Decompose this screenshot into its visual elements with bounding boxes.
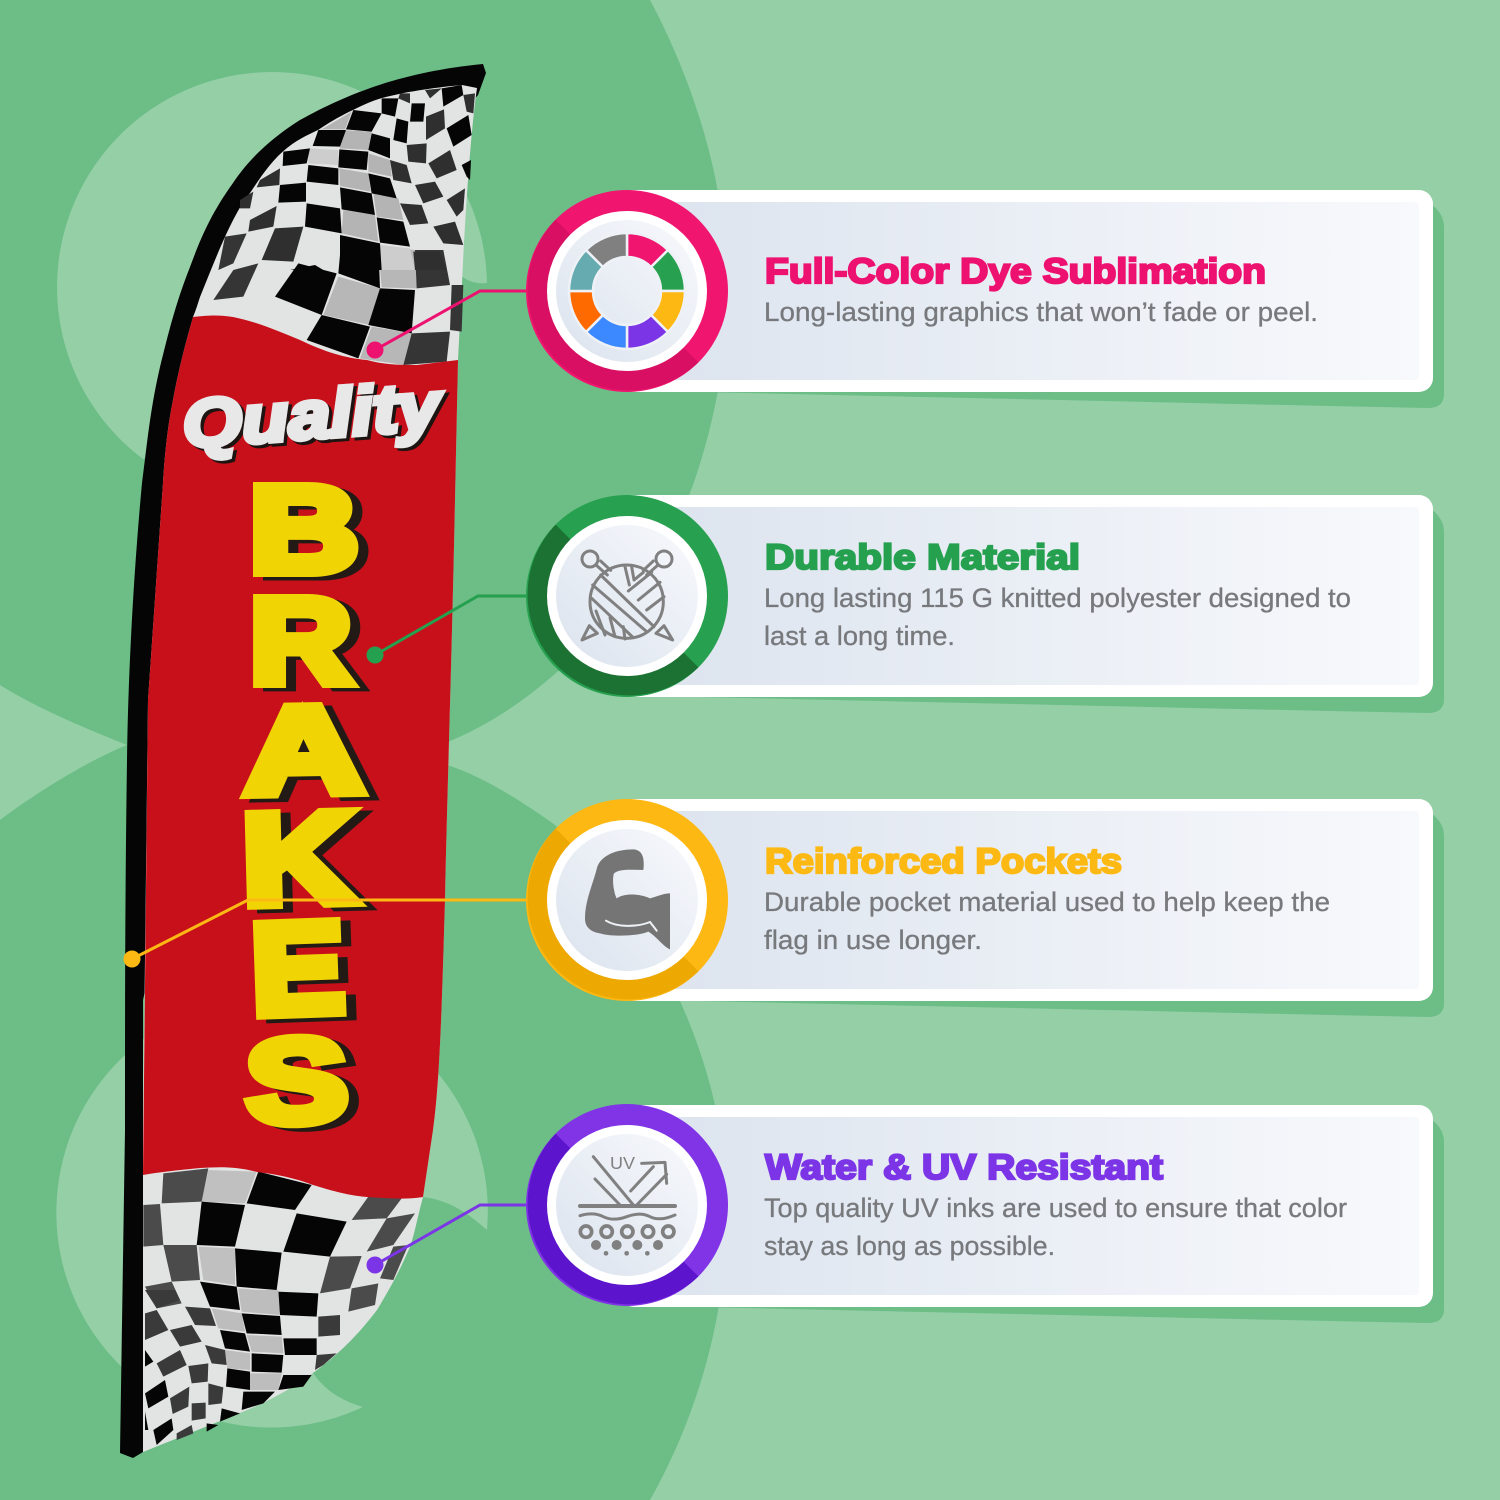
- flag word: BRAKES: R: [250, 573, 352, 708]
- top checkered pattern, lower rows: [213, 233, 463, 365]
- connector: purple: [366, 1205, 530, 1274]
- description line 2: flag in use longer.: [764, 925, 982, 955]
- heading: Full-Color Dye Sublimation: [765, 252, 1266, 291]
- icon: muscle arm badge: [526, 799, 728, 1001]
- heading: Durable Material: [765, 538, 1080, 577]
- description: Durable pocket material used to help keep the: [764, 887, 1330, 917]
- flag word: BRAKES: R: [260, 576, 362, 712]
- flag pole sleeve: [120, 64, 486, 1458]
- heading: Reinforced Pockets: [765, 842, 1122, 881]
- flag word: BRAKES: K: [251, 790, 365, 936]
- icon: color wheel badge: [526, 190, 728, 392]
- flag word: BRAKES: A: [243, 680, 364, 820]
- flag word: BRAKES: E: [259, 899, 357, 1046]
- uv layers: [580, 1153, 675, 1256]
- flag word: BRAKES: E: [249, 896, 347, 1042]
- panel: full-color dye sublimation: [620, 190, 1444, 408]
- bottom checkered pattern, upper rows: [143, 1168, 415, 1317]
- flag word: BRAKES: S: [244, 1013, 350, 1149]
- description line 2: stay as long as possible.: [764, 1231, 1055, 1261]
- connector: pink: [366, 291, 530, 358]
- red flag body: [143, 316, 458, 1199]
- yarn ball: [582, 551, 673, 640]
- color wheel: [557, 221, 697, 361]
- top checkered pattern, upper rows: [240, 85, 475, 270]
- panel: durable material: [620, 495, 1444, 713]
- uv layers: UV: [610, 1153, 635, 1173]
- flag word: BRAKES: B: [250, 462, 359, 598]
- feather flag: [120, 64, 486, 1458]
- panel: water and uv resistant: [620, 1105, 1444, 1323]
- flag word: Quality: Quality: [180, 367, 446, 463]
- connector: green: [366, 596, 530, 664]
- description: Long lasting 115 G knitted polyester designed to: [764, 583, 1351, 613]
- icon: yarn ball badge: [526, 495, 728, 697]
- flag word: BRAKES: [241, 462, 374, 1152]
- heading: Water & UV Resistant: [765, 1148, 1163, 1187]
- flag word: BRAKES: A: [253, 684, 374, 823]
- flag fabric: [143, 85, 477, 1452]
- flexed arm: [585, 849, 670, 949]
- flag word: Quality: Quality: [183, 370, 450, 466]
- connector: yellow: [124, 900, 530, 968]
- description line 2: last a long time.: [764, 621, 955, 651]
- flag word: BRAKES: B: [260, 465, 369, 602]
- icon: uv protection badge: [526, 1104, 728, 1306]
- flag word: BRAKES: S: [254, 1017, 360, 1152]
- panel: reinforced pockets: [620, 799, 1444, 1017]
- description: Top quality UV inks are used to ensure that color: [764, 1193, 1347, 1223]
- bottom checkered pattern, lower rows: [145, 1290, 340, 1445]
- description: Long-lasting graphics that won’t fade or peel.: [764, 297, 1318, 327]
- flag word: BRAKES: K: [241, 786, 355, 932]
